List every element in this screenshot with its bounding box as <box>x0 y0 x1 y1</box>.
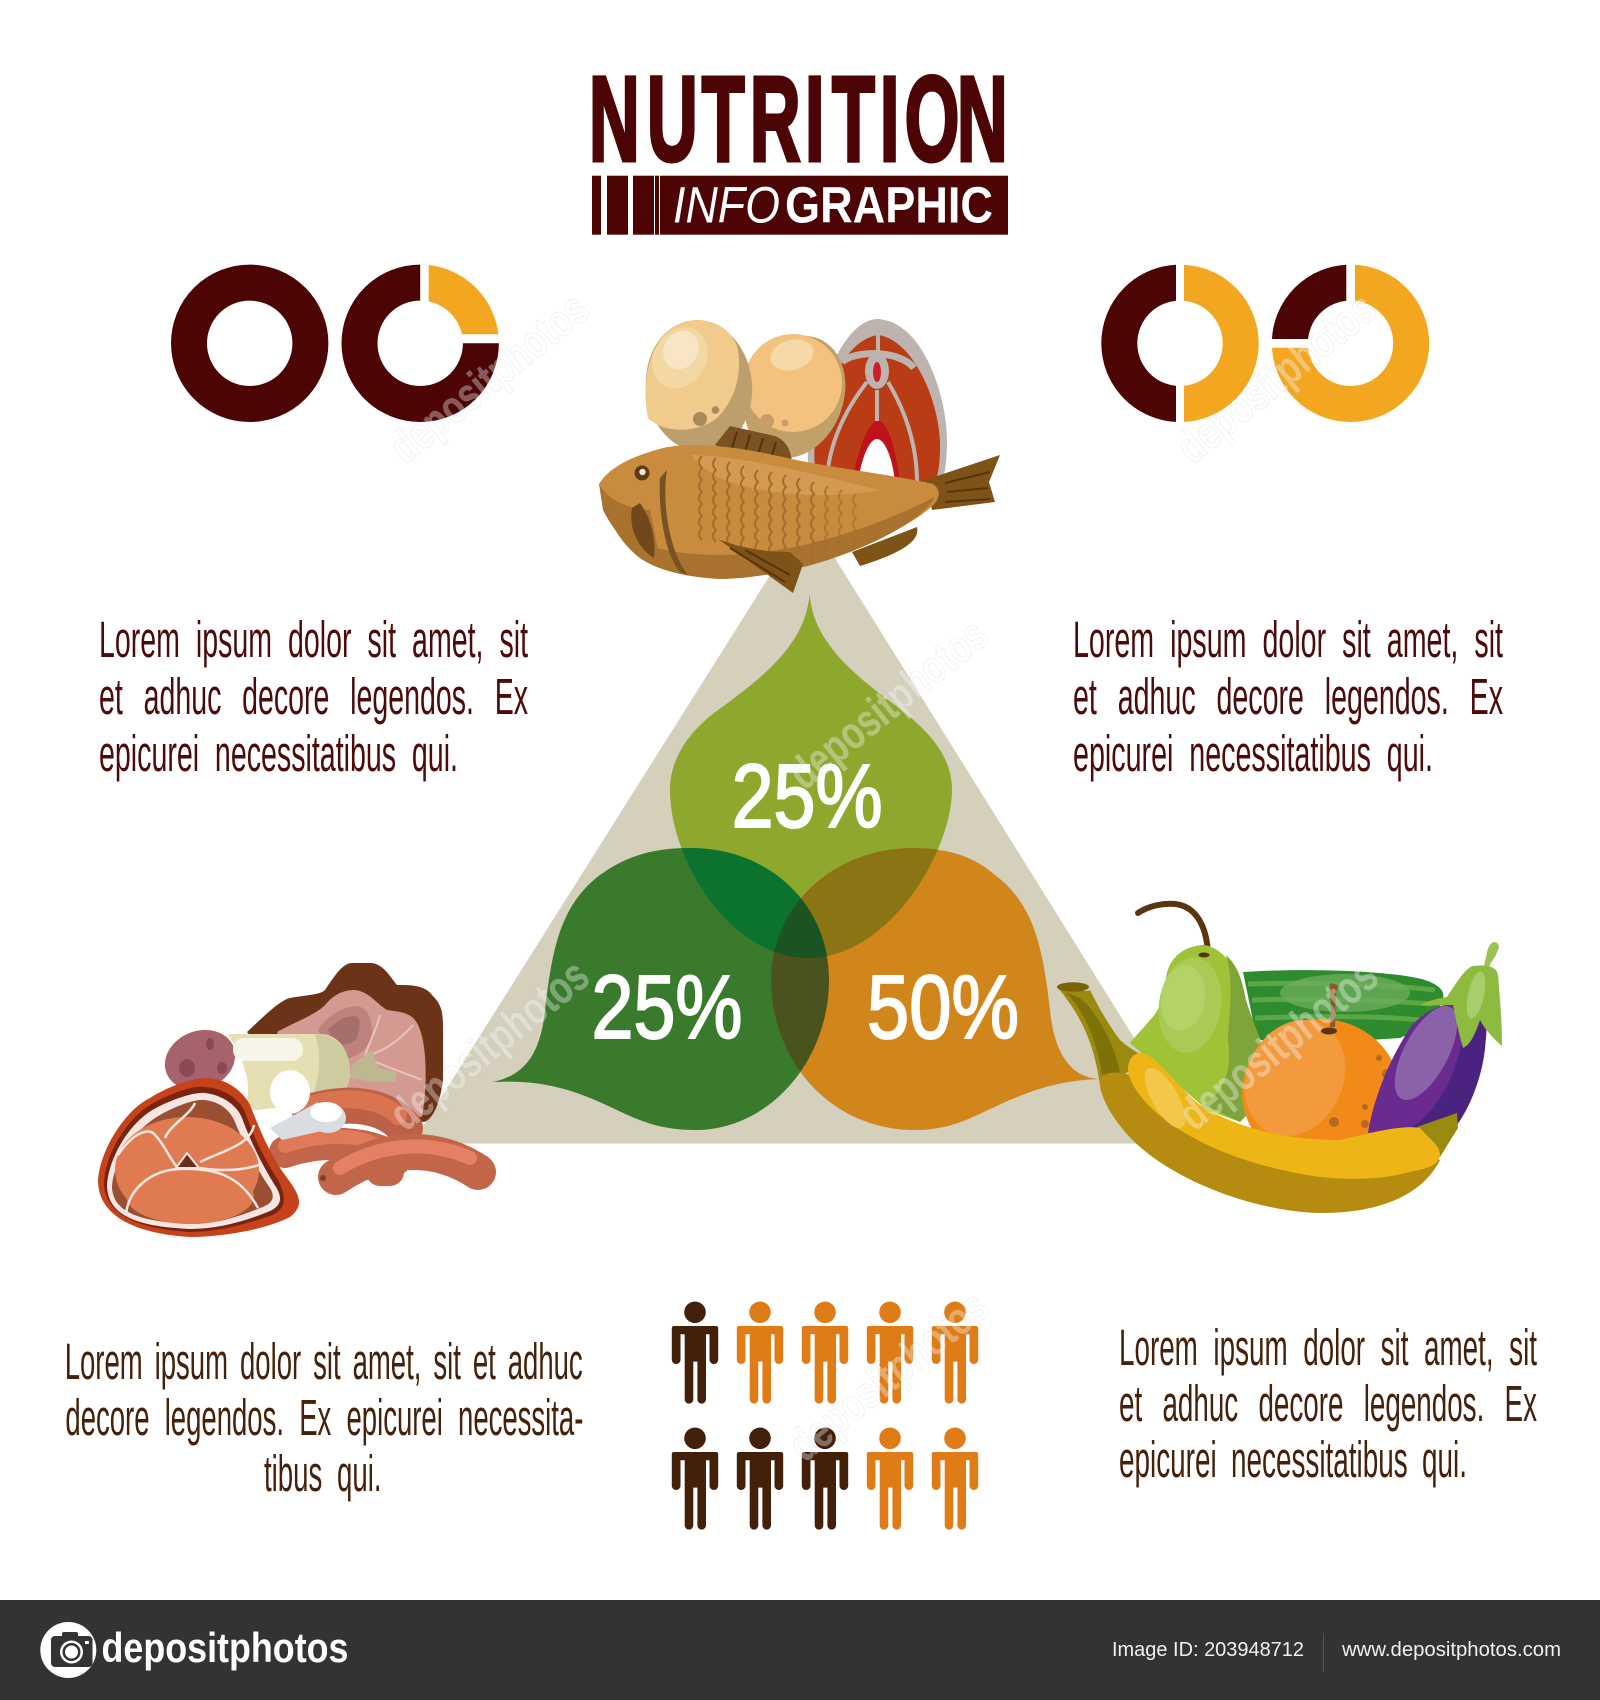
food pyramid <box>422 558 1142 1144</box>
icon: back ham <box>247 963 443 1122</box>
watermarks: depositphotos <box>1166 282 1385 473</box>
subtitle: GRAPHIC: GRAPHIC <box>785 176 993 234</box>
text block: lower left <box>65 1333 583 1502</box>
value: left 25%: 25% <box>592 958 742 1058</box>
icon: eggplant <box>1368 942 1502 1133</box>
text block: lower left: decore legendos. Ex epicurei necessita- <box>65 1389 583 1446</box>
petal: olive <box>670 594 952 958</box>
icon: salami <box>156 1020 397 1112</box>
people row 1 <box>672 1302 978 1404</box>
text block: lower left: Lorem ipsum dolor sit amet, sit et adhuc <box>65 1333 583 1390</box>
title block <box>589 50 1008 235</box>
text block: upper right <box>1073 611 1503 782</box>
donut charts left <box>189 283 481 404</box>
overlaps <box>682 848 938 1072</box>
icon: salmon steak <box>808 319 947 482</box>
icon: sausages <box>285 1099 478 1181</box>
footer background <box>0 1600 1600 1700</box>
petal: dark green <box>493 848 829 1130</box>
image id: Image ID: 203948712 <box>1112 1639 1304 1661</box>
watermarks: depositphotos <box>778 1280 997 1471</box>
value: top 25%: 25% <box>732 747 883 847</box>
donut: full <box>189 283 310 404</box>
text block: upper left: epicurei necessitatibus qui. <box>99 725 458 782</box>
icon: bone <box>270 1070 346 1140</box>
footer banner <box>0 1600 1600 1700</box>
watermarks: depositphotos <box>379 282 598 473</box>
donut: half <box>1119 283 1241 404</box>
icon: fish <box>599 426 1000 593</box>
icon: meats <box>98 963 478 1237</box>
icon: orange <box>1226 983 1400 1167</box>
text block: lower right <box>1119 1319 1537 1488</box>
text block: upper left <box>99 611 528 782</box>
people row 2 <box>672 1428 978 1530</box>
value: right 50%: 50% <box>867 958 1019 1058</box>
petal: amber <box>771 848 1100 1130</box>
icon: pear <box>1130 904 1263 1122</box>
text block: upper left: et adhuc decore legendos. Ex <box>99 668 528 725</box>
icon: cucumber <box>1243 970 1443 1041</box>
icon: egg left <box>639 315 759 457</box>
title: NUTRITION: NUTRITION <box>589 50 1008 186</box>
icon: ham steak <box>98 1078 299 1237</box>
subtitle bar <box>660 176 1008 235</box>
donut: one quarter <box>360 283 481 404</box>
watermarks: depositphotos <box>1168 949 1387 1140</box>
donut charts right <box>1119 283 1411 404</box>
text block: lower left: tibus qui. <box>264 1445 382 1502</box>
subtitle bar stripes <box>592 176 659 235</box>
icon: camera logo <box>40 1622 96 1678</box>
watermarks: depositphotos <box>778 608 997 799</box>
watermarks <box>379 282 1387 1471</box>
icon: fruit and vegetables <box>1057 904 1502 1213</box>
icon: egg right <box>727 321 863 473</box>
pictogram chart: people <box>672 1302 978 1530</box>
watermarks: depositphotos <box>379 949 598 1140</box>
icon: eggs, salmon and fish <box>599 315 1000 593</box>
logo wordmark: depositphotos <box>102 1624 348 1671</box>
icon: banana <box>1057 982 1458 1213</box>
pyramid triangle <box>412 515 1200 1144</box>
donut: three quarters <box>1290 283 1411 404</box>
subtitle: INFO: INFO <box>673 176 780 234</box>
site url: www.depositphotos.com <box>1341 1639 1561 1661</box>
text block: upper left: Lorem ipsum dolor sit amet, sit <box>99 611 528 668</box>
